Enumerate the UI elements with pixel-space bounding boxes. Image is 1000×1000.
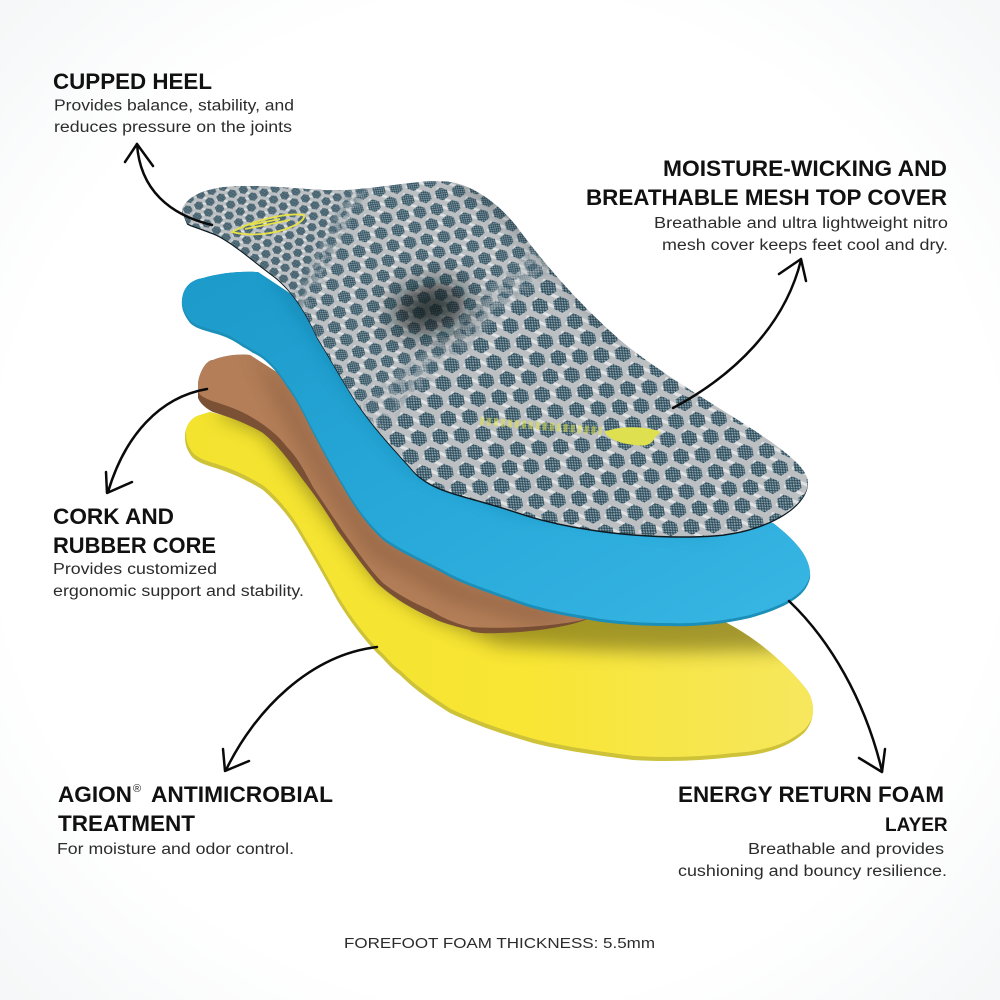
insole layer: cork and rubber core xyxy=(198,350,590,633)
callout: mesh top cover: BREATHABLE MESH TOP COVER xyxy=(586,185,947,210)
callout: mesh top cover: Breathable and ultra lightweight nitro xyxy=(654,215,948,232)
callout: cork and rubber core: Provides customized xyxy=(53,561,217,578)
callout: antimicrobial treatment: AGION xyxy=(58,782,132,807)
arrow: energy return foam xyxy=(789,601,885,772)
arrow: cork core xyxy=(106,389,207,493)
callout: energy return foam: ENERGY RETURN FOAM xyxy=(678,782,944,807)
callout: cork and rubber core: CORK AND xyxy=(53,504,174,529)
callout: energy return foam: LAYER xyxy=(885,815,948,836)
insole layer: yellow antimicrobial base xyxy=(185,400,814,761)
callout: antimicrobial treatment xyxy=(57,782,333,858)
icon: heel logo xyxy=(232,214,304,234)
insole layer: grey breathable mesh top cover xyxy=(170,170,820,550)
footnote: forefoot foam thickness: FOREFOOT FOAM THICKNESS: 5.5mm xyxy=(344,936,655,952)
callout: energy return foam xyxy=(678,782,948,880)
callout: antimicrobial treatment: ANTIMICROBIAL xyxy=(151,782,333,807)
callout: cupped heel xyxy=(53,69,294,136)
insole layer: blue energy return foam xyxy=(182,260,810,626)
callout: cork and rubber core: ergonomic support and stability. xyxy=(53,583,304,600)
callout: mesh top cover: MOISTURE-WICKING AND xyxy=(663,156,947,181)
arrow: antimicrobial treatment xyxy=(223,647,377,771)
callout: mesh top cover: mesh cover keeps feet cool and dry. xyxy=(662,237,948,254)
arrow: cupped heel xyxy=(125,144,212,225)
icon: forefoot logo xyxy=(480,421,660,445)
callout: energy return foam: cushioning and bouncy resilience. xyxy=(678,863,947,880)
callout: antimicrobial treatment: ® xyxy=(133,783,141,795)
callout: cupped heel: Provides balance, stability, and xyxy=(54,98,294,114)
arrow: mesh top cover xyxy=(673,259,806,408)
callout: energy return foam: Breathable and provides xyxy=(748,841,944,858)
callout: antimicrobial treatment: For moisture and odor control. xyxy=(57,841,294,858)
callout: mesh top cover xyxy=(586,156,948,254)
callout: cork and rubber core xyxy=(53,504,304,600)
callout: cupped heel: CUPPED HEEL xyxy=(53,69,212,94)
callout: cupped heel: reduces pressure on the joints xyxy=(54,119,292,136)
callout: antimicrobial treatment: TREATMENT xyxy=(58,811,196,836)
callout: cork and rubber core: RUBBER CORE xyxy=(53,533,216,558)
